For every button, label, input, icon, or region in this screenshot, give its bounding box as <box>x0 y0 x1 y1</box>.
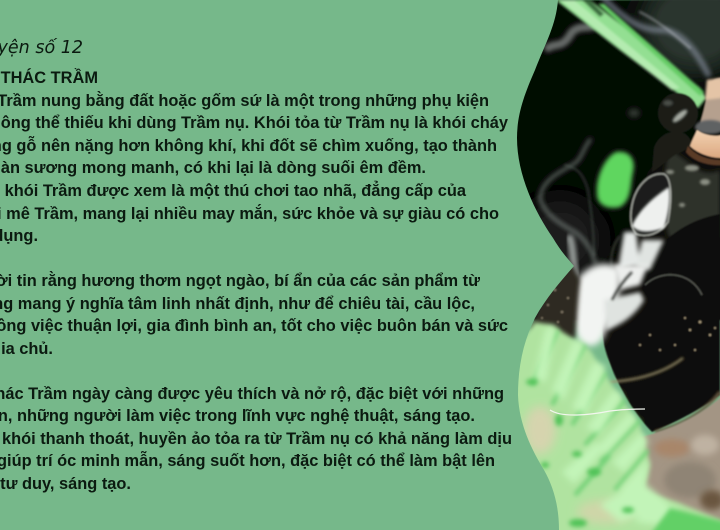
tan rock <box>644 397 720 521</box>
paragraph 3: Thác Trầm ngày càng được yêu thích và nở rộ, đặc biệt với những <box>0 385 504 403</box>
grainy brown surface <box>530 262 580 340</box>
smoke wisps: lower left <box>540 140 595 274</box>
fern: gaps between leaflets <box>532 330 648 495</box>
paragraph 2: công việc thuận lợi, gia đình bình an, tốt cho việc buôn bán và sức <box>0 317 508 335</box>
paragraph 2 <box>0 271 508 358</box>
ceramic highlights <box>666 165 710 207</box>
text column <box>0 38 512 493</box>
fern: leaflets <box>534 326 680 525</box>
thin white fibre <box>550 409 645 415</box>
lower body sparkles <box>639 317 716 351</box>
blurred green blob in background <box>597 152 634 208</box>
leaf blades <box>556 0 706 108</box>
fern: base wash <box>510 322 720 530</box>
photo: incense waterfall burner with smoke and fern <box>517 0 720 530</box>
dark background <box>500 0 720 320</box>
ring and smoke falling out of it <box>631 174 671 236</box>
knob <box>658 93 698 133</box>
smoke wisps: upper <box>548 0 708 74</box>
burner body <box>602 146 720 432</box>
incense cone <box>686 78 720 165</box>
fern: shadows and saturated green <box>526 379 634 527</box>
white smoke cascade <box>618 232 664 270</box>
paragraph 3 <box>0 385 512 493</box>
paragraph 1 <box>0 91 508 245</box>
